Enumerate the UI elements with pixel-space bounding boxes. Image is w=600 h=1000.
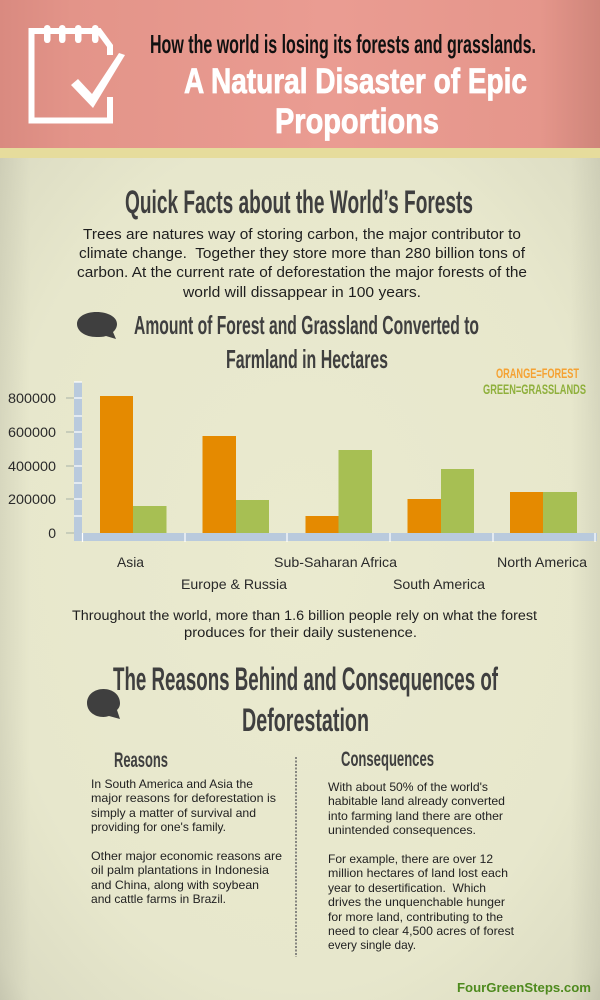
subheading: consequences: Consequences [341,748,434,771]
text block: forest facts: Trees are natures way of storing carbon, the major contributor to [83,227,521,243]
bars: Europe and Russia [202,436,269,533]
category labels: Asia [117,554,144,570]
panel: consequences [328,748,515,952]
text block: forest facts: world will dissappear in 100 years. [182,285,421,301]
y axis labels [8,390,56,541]
panel: reasons [91,749,282,906]
heading: chart title [134,310,479,374]
text block: reasons body: oil palm plantations in Indonesia [91,863,269,877]
footer source: FourGreenSteps.com [457,980,591,995]
bars: Asia [100,396,166,533]
text block: consequences body: For example, there are over 12 [328,852,493,866]
text block: consequences body: drives the unquenchable hunger [328,895,505,909]
y axis labels: 400000 [8,458,56,474]
text block: reasons body: and cattle farms in Brazil. [91,892,226,906]
category labels: North America [497,554,587,570]
text block: consequences body: into farming land there are other [328,809,503,823]
category labels: Sub-Saharan Africa [274,554,397,570]
text block: consequences body: unintended consequences. [328,823,476,837]
text block: forest facts: climate change. Together they store more than 280 billion tons of [79,246,526,262]
text block: reasons body: In South America and Asia the [91,777,253,791]
category labels [117,554,587,592]
text block: reasons body: simply a matter of survival and [91,806,256,820]
legend [483,365,586,397]
text block: consequences body: for more land, contributing to the [328,910,503,924]
text block: consequences body: million hectares of land lost each [328,866,508,880]
chart axes [66,382,597,542]
bar chart [8,382,597,592]
category labels: South America [393,576,485,592]
text block: sustenance fact [72,608,537,640]
text block: reasons body [91,777,282,906]
text block: reasons body: and China, along with soybean [91,878,259,892]
icon: speech bubble [87,689,120,719]
y axis labels: 600000 [8,424,56,440]
bars: Sub-Saharan Africa [306,450,372,533]
text block: consequences body: every single day. [328,938,416,952]
y axis labels: 800000 [8,390,56,406]
bars: South America [408,469,474,533]
text block: consequences body: need to clear 4,500 acres of forest [328,924,515,938]
heading: reasons and consequences [113,661,498,738]
text block: sustenance fact: Throughout the world, more than 1.6 billion people rely on what the forest [72,608,537,623]
heading: chart title: Farmland in Hectares [226,344,388,374]
text block: reasons body: Other major economic reasons are [91,849,282,863]
subheading: reasons: Reasons [114,749,168,772]
y axis labels: 0 [48,525,56,541]
main title line 2: Proportions [275,102,439,141]
text block: sustenance fact: produces for their daily sustenence. [184,625,417,640]
category labels: Europe & Russia [181,576,287,592]
text block: consequences body: year to desertification. Which [328,881,486,895]
text block: forest facts [77,227,527,301]
text block: forest facts: carbon. At the current rate of deforestation the major forests of the [77,265,527,281]
icon: speech bubble [77,312,117,339]
main title line 1: A Natural Disaster of Epic [184,62,527,101]
header banner [0,0,600,158]
icon: notepad with check mark [32,25,125,120]
text block: consequences body [328,780,515,952]
y axis labels: 200000 [8,491,56,507]
text block: consequences body: With about 50% of the world's [328,780,488,794]
text block: reasons body: providing for one's family. [91,820,226,834]
text block: consequences body: habitable land already converted [328,794,505,808]
bars: North America [510,492,577,533]
heading: reasons and consequences: Deforestation [242,702,369,738]
text block: reasons body: major reasons for deforestation is [91,791,276,805]
